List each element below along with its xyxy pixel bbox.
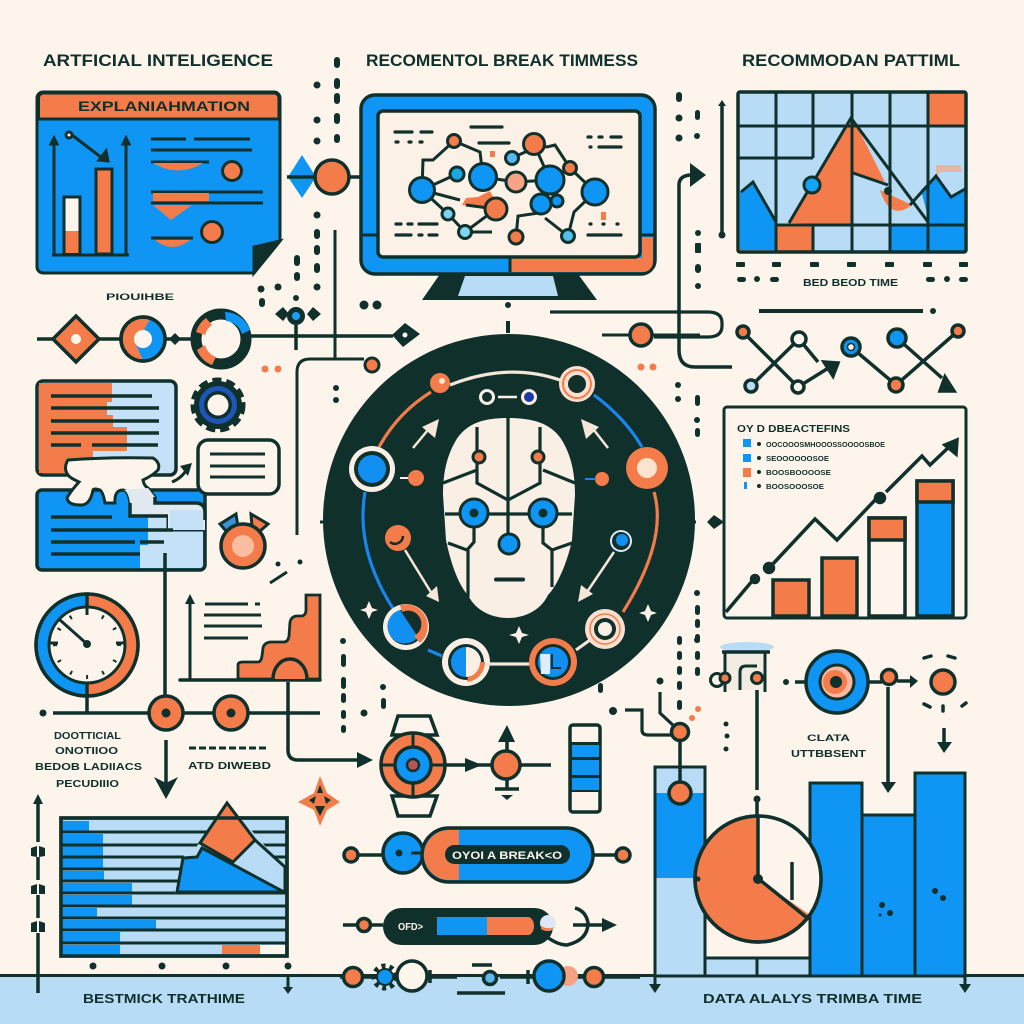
arrow: monitor to pattern chart xyxy=(550,163,732,367)
text: data utilisation xyxy=(791,733,867,760)
face xyxy=(443,418,575,618)
panel: orange and blue puzzle documents xyxy=(37,381,205,570)
branch and nodes above circle xyxy=(297,323,700,535)
small down arrow xyxy=(283,975,293,994)
inner arrows xyxy=(405,419,614,602)
node post on tall bar xyxy=(669,690,760,816)
left vertical arrow xyxy=(31,794,45,993)
footer text right: DATA ALALYS TRIMBA TIME xyxy=(703,991,922,1006)
explanation bar chart xyxy=(51,132,129,255)
slider bar xyxy=(343,908,617,945)
panel heading: OY D DBEACTEFINS xyxy=(737,424,850,435)
text: data utilisation: UTTBBSENT xyxy=(791,748,867,760)
panel heading: explanation: EXPLANIAHMATION xyxy=(78,98,250,114)
slider bar: OFD> xyxy=(398,922,423,933)
caption: provide: PIOUIHBE xyxy=(106,292,174,303)
line graph nodes right xyxy=(737,308,964,393)
decorative dot columns upper left xyxy=(258,57,340,307)
icon: gear xyxy=(193,380,243,430)
text block: and diverse: ATD DIWEBD xyxy=(188,760,272,772)
central AI circle xyxy=(320,334,696,706)
text block: left notes: PECUDIIIO xyxy=(56,779,119,790)
puzzle join xyxy=(66,458,205,530)
footer band xyxy=(0,974,1024,1024)
text block: and diverse xyxy=(188,748,272,772)
decorative dots right of monitor xyxy=(505,92,701,333)
ticks under pattern chart xyxy=(736,262,968,282)
title: artificial intelligence: ARTFICIAL INTELIGENCE xyxy=(43,51,273,70)
footer text left: BESTMICK TRATHIME xyxy=(83,992,245,1006)
small step area chart xyxy=(180,594,320,680)
panel: striped table with mountain xyxy=(61,802,287,956)
text block: left notes: ONOTIIOO xyxy=(55,746,118,757)
pill: break label xyxy=(344,828,630,882)
mountain xyxy=(175,802,285,893)
decorative small dots xyxy=(262,300,681,583)
target node and arrows top right xyxy=(783,651,966,793)
stacked bars xyxy=(773,481,953,616)
caption: best break time: BED BEOD TIME xyxy=(803,278,898,289)
arrow: down to table xyxy=(154,740,178,799)
title: recommended break times: RECOMENTOL BREAK TIMMESS xyxy=(366,51,638,70)
panel: monitor with neural network xyxy=(361,95,655,300)
icon: orange badge xyxy=(220,514,268,568)
node row: left process flow xyxy=(37,307,393,365)
bottom dots xyxy=(90,962,292,970)
icon: orange star xyxy=(298,776,340,826)
legend: SEOOOOOOSOE xyxy=(766,456,829,463)
legend: OOCOOOSMHOOOSSOOOOSBOE xyxy=(766,442,885,449)
icon: watch xyxy=(381,716,445,816)
pill: break label: OYOI A BREAK<O xyxy=(452,850,563,862)
explanation text lines xyxy=(151,139,263,247)
orbit nodes xyxy=(349,366,668,686)
icon: phone slider xyxy=(569,725,601,812)
screen text dashes xyxy=(395,127,621,235)
connector dots left of panel xyxy=(694,395,724,643)
arrow: vertical scale beside pattern chart xyxy=(718,100,726,238)
legend: BOOSOOOSOE xyxy=(766,484,824,491)
pie chart xyxy=(695,816,821,942)
gauge xyxy=(36,594,138,713)
arrow: to watch xyxy=(288,682,373,768)
icon: connector star node xyxy=(275,307,321,325)
text block: left notes: DOOTTICIAL xyxy=(54,731,121,742)
text block: left notes: BEDOB LADIIACS xyxy=(35,762,142,773)
panel: explanation card xyxy=(37,92,280,273)
network graph xyxy=(410,134,608,244)
table rows xyxy=(63,821,285,955)
donut chart xyxy=(196,312,250,365)
connected node right of watch xyxy=(445,725,551,800)
title: recommendation pattern: RECOMMODAN PATTIML xyxy=(742,51,960,70)
chat bubble xyxy=(198,440,279,494)
icon: stool table xyxy=(710,642,774,692)
bottom centre dots and connector xyxy=(340,634,730,752)
panel: pattern area chart xyxy=(738,92,966,252)
orbit arcs xyxy=(363,372,657,664)
node row lower left xyxy=(40,553,320,730)
monitor stand xyxy=(422,274,597,300)
connector: diamond node to monitor xyxy=(287,155,362,358)
legend xyxy=(743,439,885,491)
text: data utilisation: CLATA xyxy=(807,733,850,744)
sparkles xyxy=(360,601,657,644)
text block: left notes xyxy=(35,731,142,790)
panel: bottom right bars and pie xyxy=(649,767,971,993)
trend line xyxy=(726,440,957,612)
legend: BOOSBOOOOSE xyxy=(766,470,831,477)
bottom node strip xyxy=(340,961,640,993)
panel: break times bar and trend chart xyxy=(724,407,966,618)
